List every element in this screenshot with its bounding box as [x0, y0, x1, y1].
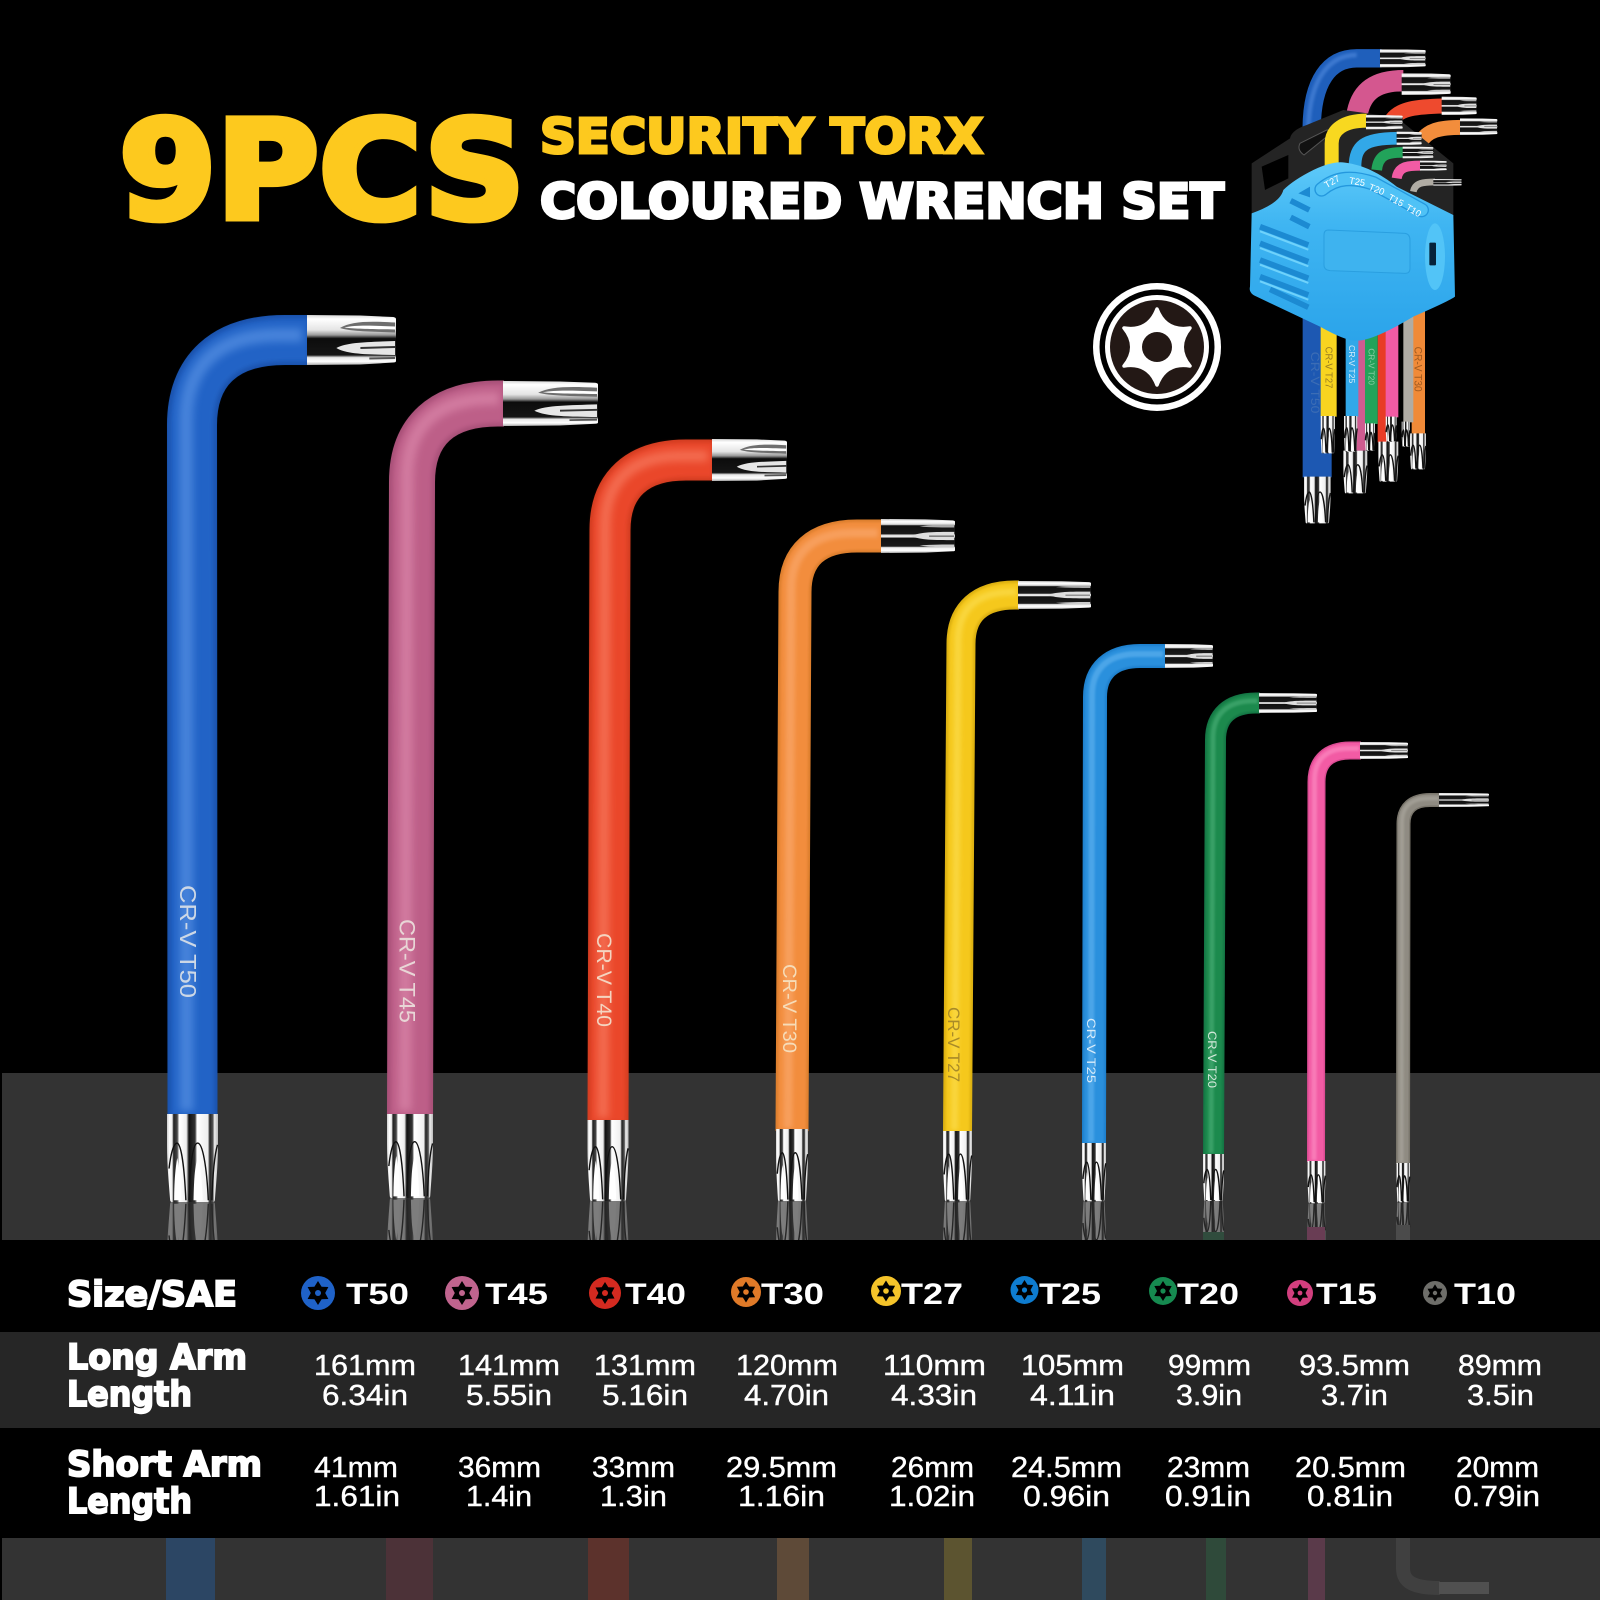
row label: short arm length: Short Arm: [67, 1445, 262, 1485]
long arm values: 141mm: [458, 1350, 560, 1382]
long arm values: 5.16in: [602, 1380, 688, 1412]
long arm values: 161mm: [314, 1350, 416, 1382]
wrench T30 orange: [776, 519, 955, 1201]
short arm values: [314, 1452, 1540, 1513]
short arm values: 20.5mm: [1295, 1452, 1406, 1484]
case size labels: [1323, 173, 1423, 219]
long arm values: 89mm: [1458, 1350, 1542, 1382]
wrench T45 mauve: CR-V T45: [394, 919, 420, 1023]
short arm values: 1.3in: [600, 1481, 667, 1513]
size T20: [1149, 1277, 1239, 1311]
case vent stripes: [1260, 201, 1309, 307]
short arm values: 1.4in: [466, 1481, 532, 1513]
wrench T45 mauve: [387, 381, 598, 1198]
row label: long arm length: Length: [67, 1375, 192, 1415]
short arm values: 20mm: [1456, 1452, 1539, 1484]
wrench T15 pink: [1308, 742, 1408, 1203]
long arm values: 6.34in: [322, 1380, 408, 1412]
row label: short arm length: Length: [67, 1482, 192, 1522]
long arm values: 5.55in: [466, 1380, 552, 1412]
long arm values: 3.9in: [1176, 1380, 1242, 1412]
case clasp: [1425, 223, 1445, 290]
title: coloured wrench set: COLOURED WRENCH SET: [540, 174, 1224, 230]
table row: short arm length: [67, 1445, 1540, 1522]
short arm values: 26mm: [891, 1452, 974, 1484]
case clasp slot: [1429, 243, 1436, 265]
wrench T40 red: CR-V T40: [592, 933, 615, 1027]
lower wrench arms: CR-V T25: [1347, 345, 1356, 384]
wrench T50 blue: [167, 315, 396, 1202]
size T27: [871, 1276, 963, 1311]
size T15: T15: [1316, 1278, 1377, 1311]
case size labels: T25: [1348, 175, 1366, 188]
short arm values: 33mm: [592, 1452, 675, 1484]
upper wrench arms in front of holder: [1332, 115, 1462, 192]
wrench T25 blue: CR-V T25: [1084, 1018, 1098, 1083]
long arm values: 4.70in: [744, 1380, 829, 1412]
wrench T20 green: CR-V T20: [1205, 1031, 1219, 1088]
size T25: T25: [1039, 1278, 1101, 1311]
long arm values: 93.5mm: [1299, 1350, 1410, 1382]
long arm values: 3.5in: [1467, 1380, 1534, 1412]
lower wrench arms: CR-V T20: [1367, 348, 1376, 386]
size T40: [589, 1277, 686, 1311]
case size banner: [1322, 179, 1422, 210]
lower wrench arms: CR-V T27: [1323, 347, 1334, 389]
size T15: [1287, 1278, 1377, 1311]
bottom floor with reflected wrenches: [2, 1538, 1600, 1600]
short arm values: 23mm: [1167, 1452, 1250, 1484]
short arm values: 24.5mm: [1011, 1452, 1122, 1484]
wrench T30 orange: CR-V T30: [778, 964, 799, 1053]
wrench T40 red: [588, 439, 787, 1201]
wrench T27 yellow: CR-V T27: [944, 1007, 963, 1082]
title: [119, 93, 1224, 251]
blue holder case: [1250, 162, 1455, 341]
long arm values: 4.33in: [891, 1380, 977, 1412]
long arm values: 120mm: [736, 1350, 838, 1382]
product photo: wrench set in holder: [1250, 49, 1497, 523]
size T50: [301, 1276, 409, 1311]
case vent highlights: [1260, 231, 1308, 300]
short arm values: 0.96in: [1023, 1481, 1110, 1513]
floor reflections of wrench tips: [168, 1198, 1410, 1240]
table row: long arm length: [67, 1338, 1542, 1415]
lower wrench arms: CR-V T50: [1308, 352, 1322, 414]
short arm values: 1.61in: [314, 1481, 400, 1513]
size T45: [445, 1276, 548, 1311]
long arm values: [314, 1350, 1542, 1412]
size T45: T45: [485, 1278, 548, 1311]
size T20: T20: [1177, 1278, 1239, 1311]
size T40: T40: [625, 1278, 686, 1311]
size T10: [1423, 1278, 1516, 1311]
size T25: [1010, 1276, 1101, 1311]
long arm values: 110mm: [883, 1350, 986, 1382]
long arm values: 131mm: [594, 1350, 696, 1382]
icon: security torx socket: [1093, 283, 1221, 411]
short arm values: 41mm: [314, 1452, 398, 1484]
table row band: long arm: [0, 1332, 1600, 1428]
upper wrench arms behind holder: [1308, 49, 1497, 143]
long arm values: 3.7in: [1321, 1380, 1388, 1412]
case size labels: T20: [1367, 182, 1386, 197]
floor panel: [2, 1073, 1600, 1240]
lower wrench arms: CR-V T30: [1411, 347, 1423, 392]
long arm values: 99mm: [1168, 1350, 1251, 1382]
table header row: size: [67, 1275, 1516, 1315]
wrench T10 grey: [1396, 793, 1489, 1202]
black holder back: [1252, 110, 1453, 217]
short arm values: 1.16in: [738, 1481, 825, 1513]
long arm values: 4.11in: [1030, 1380, 1115, 1412]
row label: size: Size/SAE: [67, 1275, 237, 1315]
size T30: T30: [761, 1278, 824, 1311]
case triangle: [1298, 187, 1310, 197]
case label plate: [1324, 230, 1410, 273]
short arm values: 36mm: [458, 1452, 541, 1484]
title: security torx: SECURITY TORX: [540, 109, 983, 165]
size T27: T27: [901, 1278, 963, 1311]
wrench T25 blue: [1082, 644, 1213, 1201]
long arm values: 105mm: [1021, 1350, 1124, 1382]
wrench T27 yellow: [943, 581, 1091, 1201]
short arm values: 29.5mm: [726, 1452, 837, 1484]
case size labels: T10: [1404, 202, 1423, 219]
title: 9PCS: 9PCS: [119, 93, 525, 251]
wrench T20 green: [1203, 693, 1317, 1201]
wrench T50 blue: CR-V T50: [175, 885, 201, 998]
short arm values: 0.91in: [1165, 1481, 1251, 1513]
lower wrench arms: [1303, 310, 1426, 523]
size T10: T10: [1454, 1278, 1516, 1311]
size T50: T50: [346, 1278, 409, 1311]
case size labels: T27: [1323, 173, 1342, 190]
short arm values: 1.02in: [889, 1481, 975, 1513]
size T30: [731, 1277, 824, 1311]
case size labels: T15: [1386, 192, 1405, 209]
short arm values: 0.79in: [1454, 1481, 1540, 1513]
row label: long arm length: Long Arm: [67, 1338, 247, 1378]
short arm values: 0.81in: [1307, 1481, 1393, 1513]
